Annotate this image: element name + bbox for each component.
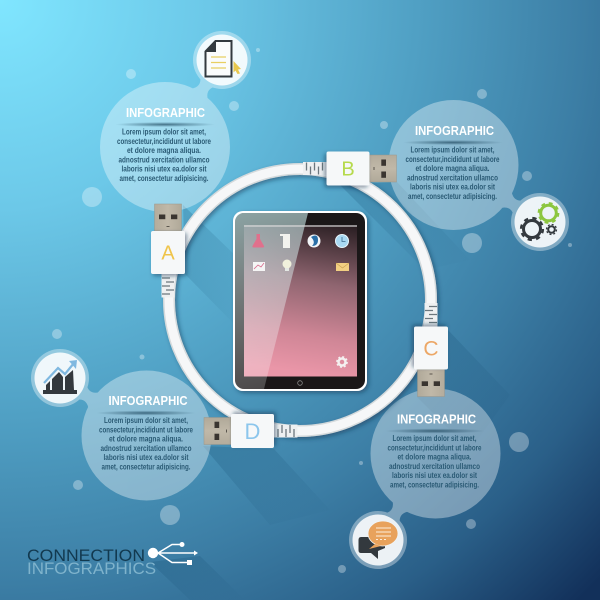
text block C: amet, consectetur adipisicing. bbox=[390, 480, 479, 490]
logo title: INFOGRAPHICS bbox=[27, 559, 156, 578]
text block B: amet, consectetur adipisicing. bbox=[408, 192, 497, 201]
logo title bbox=[27, 546, 156, 578]
heading D: INFOGRAPHIC bbox=[108, 394, 188, 408]
text block D: laboris nisi utex ea.dolor sit bbox=[104, 453, 189, 462]
home button bbox=[298, 381, 302, 385]
text block C: laboris nisi utex ea.dolor sit bbox=[392, 471, 477, 480]
connector A bbox=[151, 204, 185, 298]
app icon: gear bbox=[337, 357, 347, 367]
panel: B bbox=[388, 100, 569, 251]
app icon: scroll bbox=[280, 234, 290, 248]
panel: D bbox=[31, 349, 212, 500]
app icon: flask bbox=[252, 234, 264, 248]
cable ring bbox=[169, 169, 431, 431]
text block C: et dolore magna aliqua. bbox=[398, 452, 472, 462]
connector C bbox=[414, 303, 448, 396]
decorative dots bbox=[52, 48, 572, 573]
text block C bbox=[388, 434, 482, 490]
text block C: adnostrud xercitation ullamco bbox=[389, 462, 480, 471]
glare bbox=[235, 213, 308, 389]
text block C: Lorem ipsum dolor sit amet, bbox=[392, 434, 476, 443]
text block D: amet, consectetur adipisicing. bbox=[102, 462, 190, 472]
text block D: Lorem ipsum dolor sit amet, bbox=[104, 416, 188, 425]
panel: C bbox=[349, 388, 500, 569]
icon: speech bubbles bbox=[358, 521, 398, 559]
text block B: consectetur,incididunt ut labore bbox=[406, 155, 500, 164]
text block D: consectetur,incididunt ut labore bbox=[99, 426, 194, 434]
connector B: B bbox=[341, 158, 355, 180]
heading A: INFOGRAPHIC bbox=[126, 106, 205, 120]
long shadows bbox=[150, 182, 510, 600]
text block D: adnostrud xercitation ullamco bbox=[100, 444, 192, 453]
text block A: Lorem ipsum dolor sit amet, bbox=[122, 128, 206, 136]
app icon: bulb bbox=[282, 260, 292, 271]
text block D bbox=[99, 416, 194, 472]
text block B bbox=[406, 146, 500, 201]
icon: growth chart bbox=[43, 360, 77, 394]
text block B: adnostrud xercitation ullamco bbox=[407, 174, 498, 182]
text block A: adnostrud xercitation ullamco bbox=[118, 156, 210, 164]
tablet bbox=[233, 211, 367, 391]
text block A: amet, consectetur adipisicing. bbox=[120, 174, 208, 183]
panel: A bbox=[100, 31, 251, 212]
icon: usb symbol bbox=[148, 542, 198, 565]
connector B bbox=[303, 152, 396, 186]
text block B: Lorem ipsum dolor sit amet, bbox=[410, 146, 494, 154]
icon: document bbox=[205, 41, 241, 76]
app icon: mail bbox=[336, 263, 349, 271]
app icon: chart bbox=[253, 262, 265, 271]
text block D: et dolore magna aliqua. bbox=[109, 434, 183, 444]
text block B: laboris nisi utex ea.dolor sit bbox=[410, 182, 495, 192]
text block A: consectetur,incididunt ut labore bbox=[117, 137, 212, 146]
connector D: D bbox=[245, 419, 260, 444]
heading C: INFOGRAPHIC bbox=[397, 412, 476, 426]
connector D bbox=[204, 414, 298, 448]
connector C: C bbox=[423, 338, 439, 360]
heading B: INFOGRAPHIC bbox=[415, 124, 494, 138]
text block B: et dolore magna aliqua. bbox=[416, 164, 490, 173]
text block C: consectetur,incididunt ut labore bbox=[388, 444, 482, 452]
text block A: laboris nisi utex ea.dolor sit bbox=[122, 164, 207, 174]
app icon: clock bbox=[336, 234, 348, 248]
text block A bbox=[117, 128, 212, 183]
connector A: A bbox=[161, 242, 175, 264]
text block A: et dolore magna aliqua. bbox=[127, 146, 201, 155]
logo title: CONNECTION bbox=[27, 546, 145, 565]
app icon: globe bbox=[308, 234, 320, 248]
icon: gears bbox=[521, 203, 558, 240]
